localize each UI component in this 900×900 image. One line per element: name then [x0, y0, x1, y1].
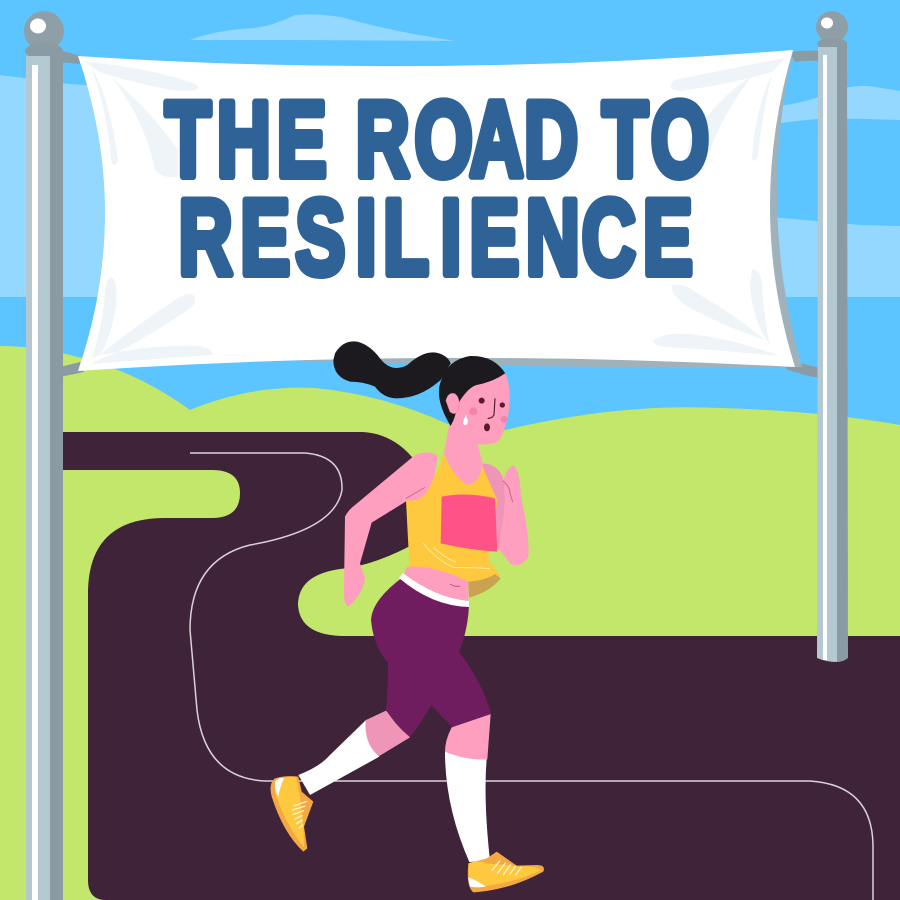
far sock	[298, 720, 379, 795]
far knee	[366, 711, 410, 757]
title line 1: THE ROAD TO	[165, 79, 709, 199]
title	[165, 79, 709, 297]
back shoe sole	[271, 776, 313, 852]
pole collar	[25, 43, 63, 59]
front shoe sole	[468, 852, 544, 892]
navel	[450, 584, 460, 586]
runner upper body	[333, 341, 529, 607]
pole stripe	[823, 55, 827, 660]
race bib	[441, 495, 497, 552]
front shoe upper	[469, 862, 542, 887]
near arm	[344, 452, 437, 607]
banner cloth	[78, 50, 795, 371]
face	[452, 373, 510, 445]
waistband	[399, 573, 469, 607]
title line 2: RESILIENCE	[178, 177, 693, 297]
sweat drop	[463, 415, 468, 425]
ear	[446, 394, 459, 413]
pole shade	[50, 50, 63, 900]
tank back hem	[468, 574, 501, 598]
road centre line	[190, 453, 873, 900]
midriff	[403, 567, 468, 602]
banner fold highlights	[85, 58, 785, 364]
back shoe heel	[275, 778, 284, 797]
banner ropes	[60, 50, 820, 378]
front shoe	[468, 852, 544, 892]
pole finial	[24, 11, 64, 51]
pole collar	[817, 38, 847, 50]
pole shade	[837, 42, 848, 662]
tank top	[406, 453, 501, 582]
runner legs	[298, 711, 491, 862]
ponytail	[333, 341, 451, 398]
shorts	[371, 577, 491, 737]
runner	[271, 341, 544, 892]
right pole	[816, 11, 848, 662]
back shoe	[271, 776, 313, 852]
pole finial	[816, 11, 848, 43]
pole shaft	[817, 47, 837, 662]
neck and chest	[444, 417, 483, 486]
eyes	[479, 398, 505, 408]
tank creases	[423, 543, 490, 569]
far forearm and fist	[498, 465, 529, 565]
back shoe upper	[275, 777, 304, 847]
hair	[439, 356, 505, 426]
pole shaft	[26, 56, 50, 900]
finial highlight	[821, 18, 833, 28]
finial highlight	[30, 18, 46, 34]
cheeks	[469, 407, 507, 423]
arm crease	[406, 487, 425, 498]
back shoe laces	[292, 801, 307, 829]
front shoe heel	[468, 877, 486, 887]
winding road	[40, 432, 900, 900]
near knee	[445, 714, 491, 760]
fist finger lines	[503, 481, 513, 502]
front shoe laces	[492, 861, 522, 875]
nose	[488, 398, 495, 418]
far arm shoulder	[482, 463, 507, 550]
mouth	[484, 423, 490, 431]
clouds	[0, 14, 900, 297]
banner shadow	[300, 52, 802, 367]
near sock	[445, 752, 490, 862]
left pole	[24, 11, 64, 900]
pole stripe	[32, 65, 38, 900]
green hills	[0, 346, 900, 900]
